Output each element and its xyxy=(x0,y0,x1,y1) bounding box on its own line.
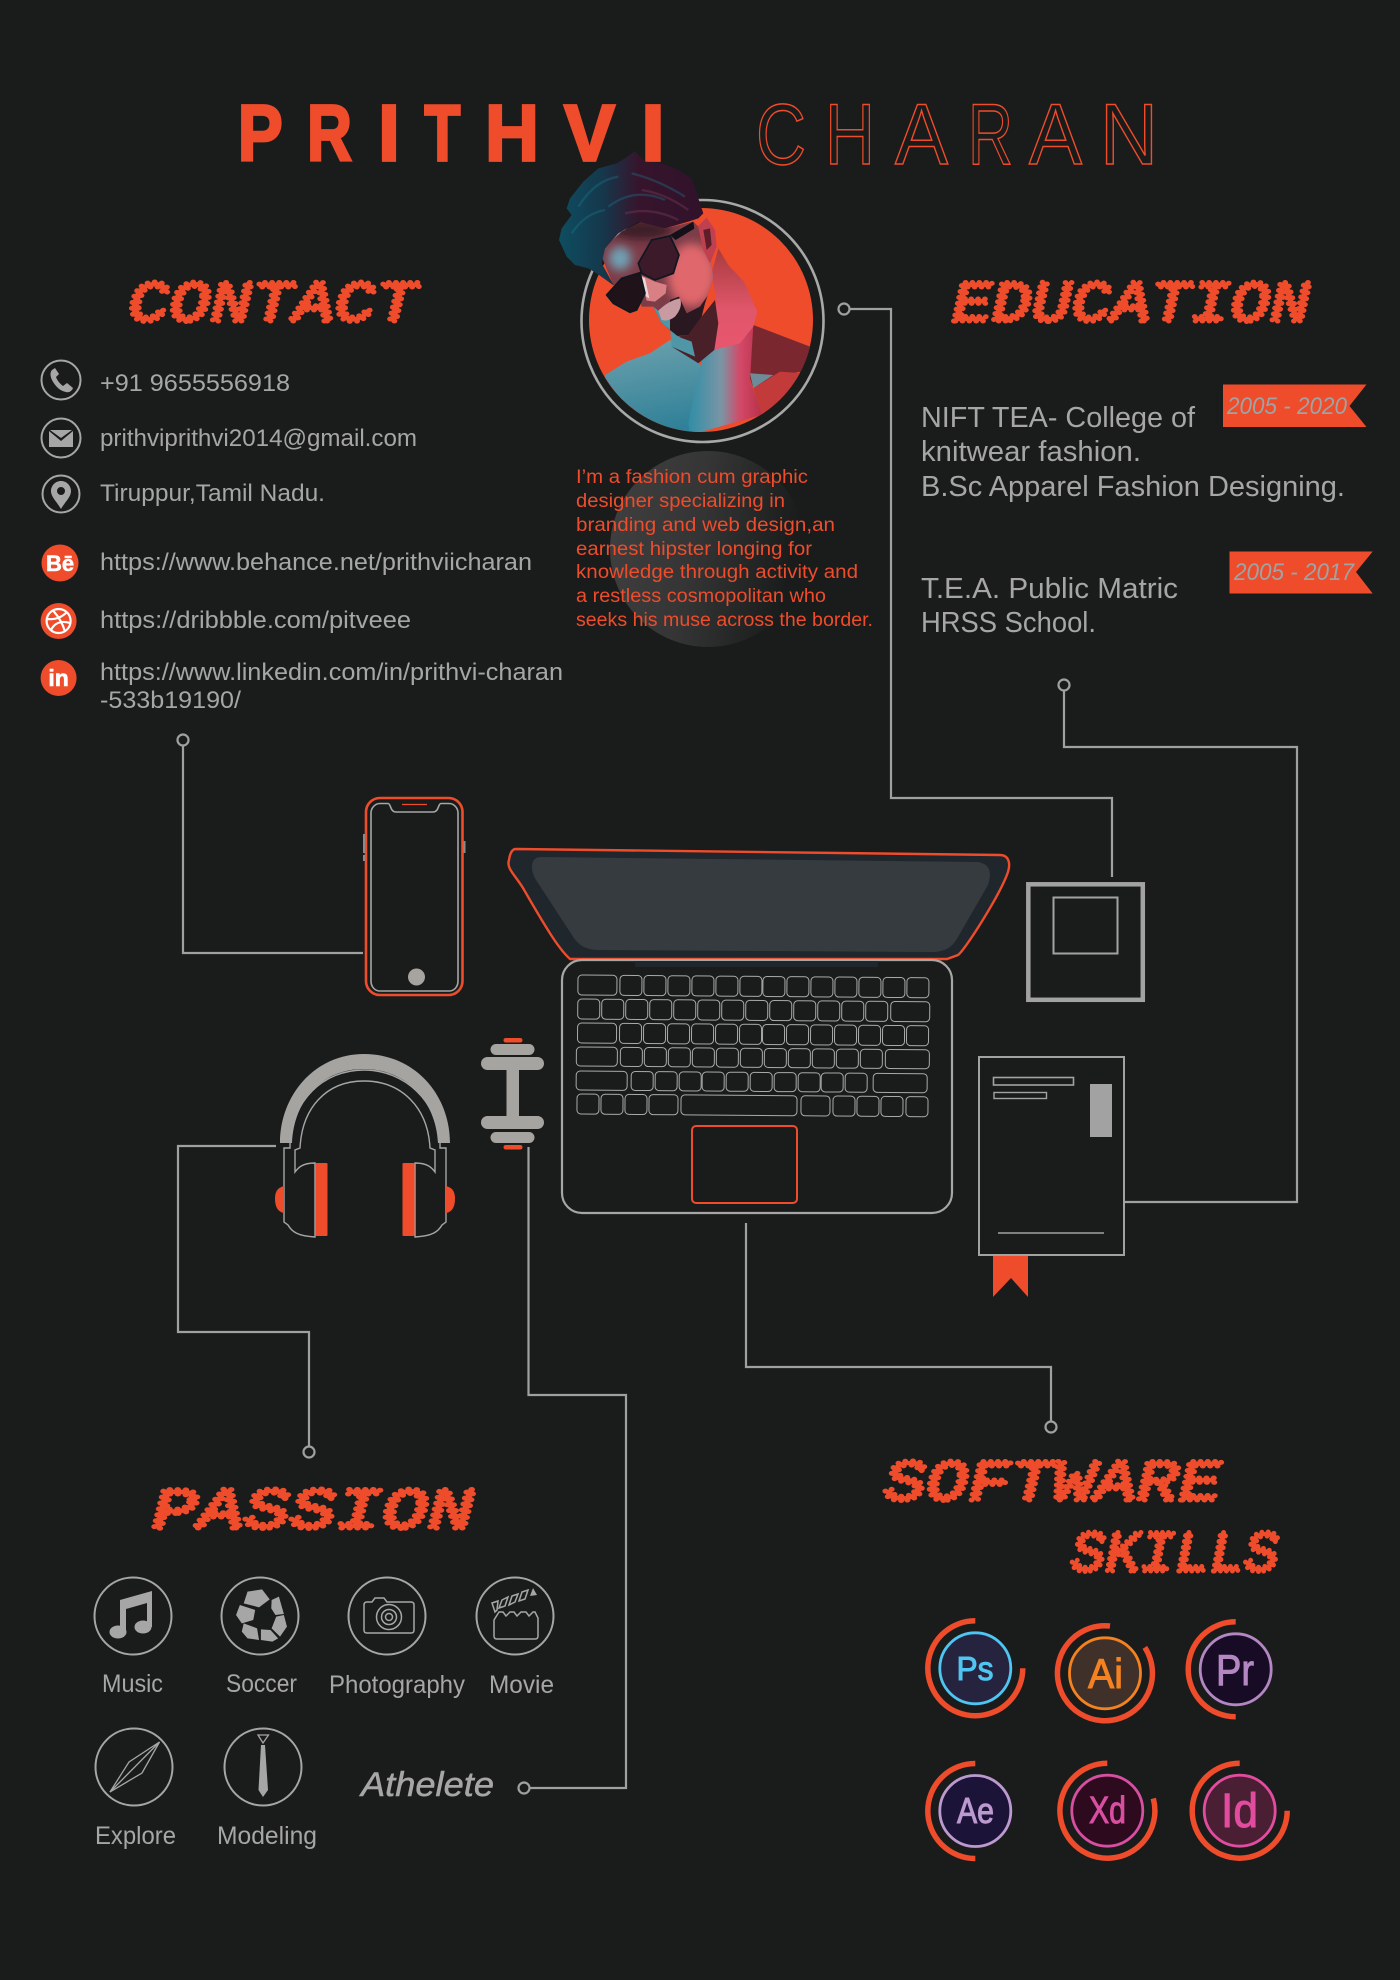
icon: linkedin xyxy=(41,660,77,696)
education entries xyxy=(921,384,1373,639)
title: first name: P xyxy=(238,89,283,178)
location: Tiruppur,Tamil Nadu. xyxy=(100,480,325,507)
skill: illustrator: Ai xyxy=(1088,1650,1123,1697)
bio text: I’m a fashion cum graphic xyxy=(576,467,808,488)
icon: dumbbell xyxy=(481,1038,544,1150)
connector: education to book xyxy=(1058,680,1297,1202)
passion: explore xyxy=(95,1728,176,1850)
connector: dumbbell to athlete xyxy=(518,1147,626,1794)
passion: movie xyxy=(476,1578,554,1699)
title: first name xyxy=(238,89,665,178)
skill: photoshop: Ps xyxy=(956,1650,994,1687)
passion: movie: Movie xyxy=(489,1671,554,1699)
heading: education: EDUCATION xyxy=(952,274,1310,339)
skill: illustrator xyxy=(1057,1626,1152,1721)
bio text: branding and web design,an xyxy=(576,515,835,536)
bio text: a restless cosmopolitan who xyxy=(576,586,826,607)
portrait xyxy=(559,151,824,442)
skill: indesign xyxy=(1192,1763,1287,1858)
heading: contact: CONTACT xyxy=(128,274,421,339)
laptop body xyxy=(562,960,952,1213)
school: HRSS School. xyxy=(921,607,1096,639)
title: first name: I xyxy=(378,89,400,178)
connector: contact to phone xyxy=(178,734,363,953)
icon: book xyxy=(979,1057,1124,1297)
school xyxy=(921,573,1178,639)
passion: modeling: Modeling xyxy=(217,1822,317,1850)
ribbon: 2005-2020: 2005 - 2020 xyxy=(1226,393,1348,420)
skill: after effects: Ae xyxy=(957,1790,994,1831)
passion: explore: Explore xyxy=(95,1822,176,1850)
title: first name: I xyxy=(641,89,665,178)
icon: headphones xyxy=(275,1054,455,1237)
trackpad xyxy=(692,1126,797,1203)
passion: photography xyxy=(329,1578,465,1699)
bio text: earnest hipster longing for xyxy=(576,539,813,560)
skill: photoshop xyxy=(928,1621,1023,1716)
passion: modeling xyxy=(217,1728,317,1850)
passion: photography: Photography xyxy=(329,1671,465,1699)
passion: music xyxy=(94,1578,172,1698)
title: first name: T xyxy=(424,89,460,178)
college: knitwear fashion. xyxy=(921,436,1141,468)
skill: xd xyxy=(1060,1763,1155,1858)
icon: linkedin: in xyxy=(48,665,69,691)
bio text xyxy=(576,467,873,631)
icon: phone xyxy=(42,360,80,400)
bio text: knowledge through activity and xyxy=(576,562,858,583)
skill: premiere: Pr xyxy=(1216,1646,1254,1695)
title: first name: R xyxy=(307,89,352,178)
icon: picture frame xyxy=(1028,884,1143,1000)
title: last name outlined: N xyxy=(1100,87,1158,183)
college xyxy=(921,402,1345,503)
bio text: designer specializing in xyxy=(576,491,785,512)
bio text: seeks his muse across the border. xyxy=(576,610,873,631)
icon: laptop xyxy=(508,849,1009,1213)
school: T.E.A. Public Matric xyxy=(921,573,1178,605)
skill: indesign: Id xyxy=(1221,1785,1258,1838)
phone number: +91 9655556918 xyxy=(100,370,290,397)
connector: laptop to software skills xyxy=(746,1223,1056,1432)
heading: software skills xyxy=(884,1453,1279,1589)
linkedin url xyxy=(100,659,563,714)
title: last name outlined: C xyxy=(756,87,806,183)
behance url: https://www.behance.net/prithviicharan xyxy=(100,549,532,576)
title: first name: H xyxy=(485,89,539,178)
skill: xd: Xd xyxy=(1089,1790,1126,1832)
ribbon: 2005-2017 xyxy=(1230,552,1373,594)
heading: passion: PASSION xyxy=(152,1481,474,1546)
title: last name outlined xyxy=(756,87,1158,183)
title: last name outlined: R xyxy=(968,87,1013,183)
icon: dribbble xyxy=(41,603,77,639)
icon: location pin xyxy=(42,476,80,512)
college: NIFT TEA- College of xyxy=(921,402,1196,434)
passion: music: Music xyxy=(102,1670,163,1698)
linkedin url: https://www.linkedin.com/in/prithvi-charan xyxy=(100,659,563,686)
bio backdrop circle xyxy=(610,451,806,647)
ribbon: 2005-2017: 2005 - 2017 xyxy=(1233,559,1356,586)
heading: software skills: SKILLS xyxy=(1071,1524,1279,1589)
email: prithviprithvi2014@gmail.com xyxy=(100,425,417,452)
skill: after effects xyxy=(928,1764,1011,1858)
laptop screen xyxy=(508,849,1009,959)
icon: mail xyxy=(42,418,80,458)
passion: soccer: Soccer xyxy=(226,1670,297,1698)
passion: athlete label: Athelete xyxy=(359,1766,494,1804)
title: last name outlined: A xyxy=(1029,87,1083,183)
icon: behance: Bē xyxy=(46,551,74,576)
passion: soccer xyxy=(222,1578,298,1698)
ribbon: 2005-2020 xyxy=(1223,384,1366,427)
title: first name: V xyxy=(564,89,615,178)
icon: behance xyxy=(42,544,78,582)
heading: software skills: SOFTWARE xyxy=(884,1453,1222,1518)
contact list xyxy=(41,360,563,714)
icon: smartphone xyxy=(364,798,464,995)
keyboard xyxy=(576,975,930,1117)
college: B.Sc Apparel Fashion Designing. xyxy=(921,471,1345,503)
title: last name outlined: A xyxy=(895,87,949,183)
connector: portrait to frame xyxy=(838,304,1112,877)
linkedin url: -533b19190/ xyxy=(100,687,241,714)
dribbble url: https://dribbble.com/pitveee xyxy=(100,607,411,634)
title: last name outlined: H xyxy=(825,87,875,183)
skill: premiere xyxy=(1188,1622,1271,1717)
connector: headphones to passion xyxy=(178,1146,314,1458)
